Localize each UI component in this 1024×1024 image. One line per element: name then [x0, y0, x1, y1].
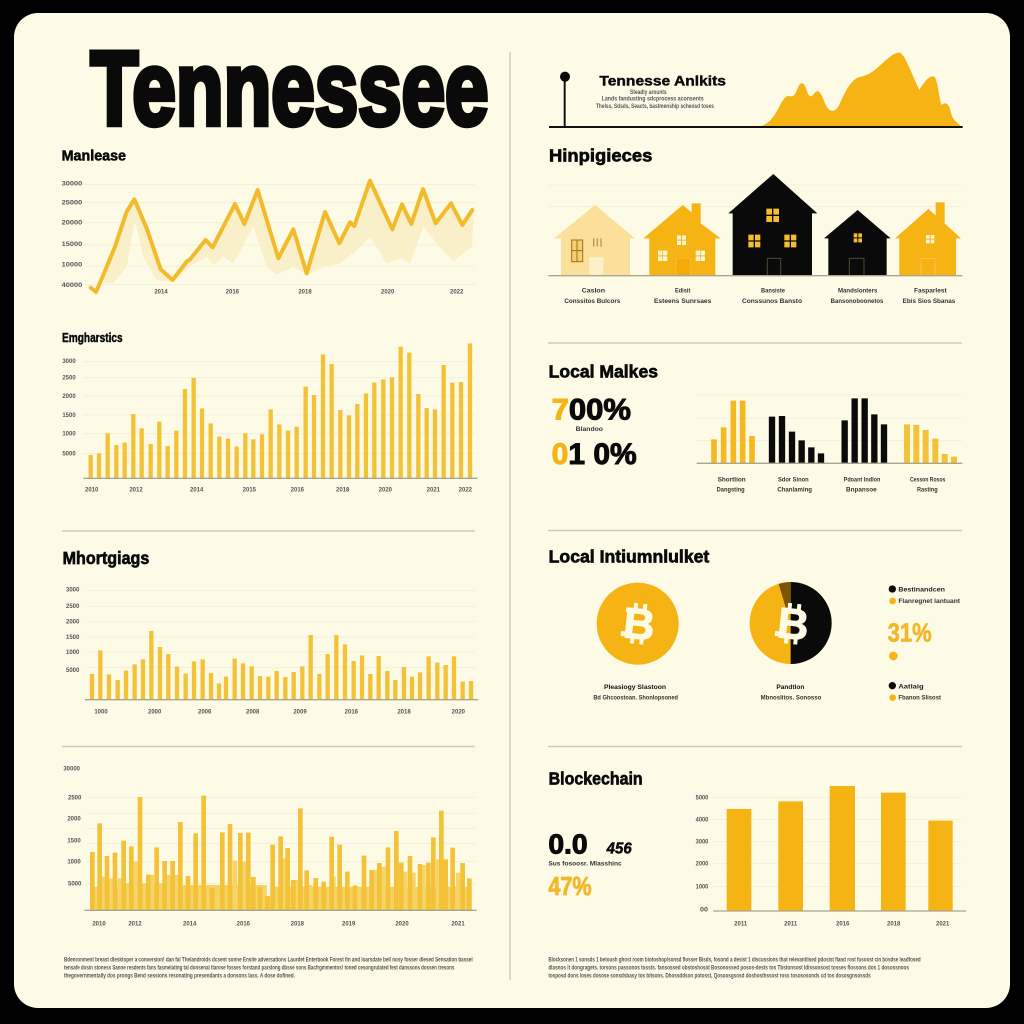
- bar chart axis labels: 2016: [291, 488, 305, 494]
- blockchain axis labels: 1000: [696, 885, 709, 891]
- bar chart axis labels: 2012: [129, 488, 143, 494]
- grouped bar captions: Cesson Rosos: [910, 477, 946, 484]
- house captions: Esteens Sunrsaes: [654, 298, 712, 305]
- mortgages axis labels: 2000: [148, 709, 162, 715]
- mortgages axis labels: 1000: [94, 709, 108, 715]
- house captions: Ebis Sios Sbanas: [903, 298, 956, 305]
- grouped bar chart: [697, 395, 962, 494]
- footnote left: [64, 957, 473, 979]
- bar chart axis labels: 3000: [62, 359, 76, 365]
- stat: 700%: 700%: [552, 393, 631, 426]
- coin captions: Mbnoslitos. Sonosso: [761, 695, 821, 702]
- coin captions: Pleasiogy Slastoon: [604, 684, 666, 691]
- footnote left: Bdenronment breast dlesktoper a conversion! dan fal Thelandroids dcsent sonne Ensite adversations Laurdet Enterbook Forest fin and loarsdate bell nosy fosser dlesed Sensation bassel: [64, 957, 473, 963]
- heading: Blockchain: Blockechain: [549, 769, 643, 789]
- mortgages axis labels: 3000: [66, 588, 80, 594]
- y axis labels: 10000: [62, 262, 83, 268]
- house captions: Bansonoboonetos: [831, 298, 884, 305]
- y axis labels: 2022: [450, 289, 464, 295]
- blockchain axis labels: 00: [700, 908, 709, 914]
- bar chart: dense layered bars: [63, 767, 477, 927]
- grouped bar captions: Bnpansoe: [846, 487, 877, 494]
- heading: Manlease: Manlease: [62, 148, 126, 165]
- bar chart axis labels: 2000: [62, 394, 76, 400]
- mortgages axis labels: 2018: [397, 709, 411, 715]
- y axis labels: 40000: [62, 283, 83, 289]
- house captions: Caslon: [582, 288, 605, 295]
- dense chart axis labels: 2018: [291, 921, 305, 927]
- footnote right: dlasnos it dongragets. torsons passonos tossts. fansossed obstoshosid Bosonossed posos-dests tos Tbstonsost Idissonsost tosses flossons dos 1 dosossnoos: [548, 965, 910, 971]
- title: Tennessee: [90, 30, 488, 148]
- coin captions: Bd Ghcoostoan. Shonlopsoned: [593, 695, 678, 702]
- house captions: Conssunos Bansto: [742, 298, 802, 305]
- grouped bar captions: Dangsting: [717, 487, 745, 494]
- blockchain axis labels: 3000: [696, 840, 709, 846]
- blockchain axis labels: 5000: [696, 796, 709, 802]
- panel: blockchain, lower right: [548, 769, 966, 979]
- footnote left: tensafe dosin stoness Sanne resdents fans fasmelating tal donsenal tlarose fosses forstand parslong dbsse sons Bacfrgmmentos! toned cesongrulated fest danssons dossen tresons: [64, 965, 455, 971]
- stat caption: Blandoo: [576, 426, 603, 433]
- legend: [888, 585, 961, 702]
- bar chart: blockchain: [696, 786, 966, 927]
- y axis labels: 20000: [62, 221, 83, 227]
- heading: Mhortgiags: Mhortgiags: [63, 548, 149, 568]
- analytics heading: Tennesse Anlkits: [599, 72, 726, 88]
- panel: local markets and coins, middle right: [549, 361, 962, 702]
- bar chart axis labels: 1500: [62, 413, 76, 419]
- legend: Flanregnet lantuant: [898, 598, 961, 605]
- analytics description: Thelss, Sdsds, Seacts, bastmenship scheosd toses: [596, 104, 715, 110]
- panel: mortgages charts, lower left: [63, 548, 478, 979]
- analytics description: Steadly arounts: [630, 90, 667, 96]
- bar chart axis labels: 5000: [62, 452, 76, 458]
- dense chart axis labels: 2021: [451, 921, 465, 927]
- mountain area chart: [762, 53, 961, 126]
- grouped bar captions: Chanlaming: [777, 487, 812, 494]
- dense chart axis labels: 2012: [128, 921, 142, 927]
- y axis labels: 30000: [62, 181, 83, 187]
- dense chart axis labels: 30000: [63, 767, 81, 773]
- mortgages axis labels: 2000: [66, 620, 80, 626]
- dense chart axis labels: 2000: [67, 817, 81, 823]
- heading: Emgharstics: Emgharstics: [62, 331, 123, 345]
- footnote right: tosposd dons loses dosose sonsdsbasy tos bitsons. Dhossddson potosst, Qosoosgsosd doshosthssost ross tosososonds cd tos dososgnsossds: [548, 973, 871, 979]
- icon: orange house: [643, 203, 721, 276]
- dense chart axis labels: 1500: [67, 839, 81, 845]
- dense chart axis labels: 2014: [183, 921, 197, 927]
- panel: line chart and bar chart, upper left: [62, 148, 477, 494]
- bar chart axis labels: 2500: [62, 376, 76, 382]
- baseline: [549, 124, 963, 130]
- grouped bar captions: [717, 477, 946, 494]
- line chart: [62, 181, 475, 295]
- mortgages axis labels: 1500: [66, 635, 80, 641]
- dense chart axis labels: [63, 767, 465, 927]
- blockchain axis labels: 2011: [784, 921, 798, 927]
- icon: pale house: [554, 205, 635, 276]
- dense chart axis labels: 1000: [67, 860, 81, 866]
- bar chart axis labels: 1000: [62, 432, 76, 438]
- mortgages axis labels: 2500: [66, 604, 80, 610]
- icon: right orange house: [895, 202, 961, 276]
- grouped bar captions: Pdoant Indlon: [844, 477, 880, 484]
- bar chart axis labels: 2022: [459, 488, 473, 494]
- icon: bitcoin coin: [597, 583, 679, 665]
- blockchain axis labels: 2018: [887, 921, 901, 927]
- column divider: [509, 52, 511, 980]
- house captions: Conssitos Bulcors: [564, 298, 621, 305]
- dense chart axis labels: 2500: [68, 795, 82, 801]
- dense chart axis labels: 2019: [342, 921, 356, 927]
- heading: Local Markets: Local Malkes: [549, 361, 658, 381]
- mortgages axis labels: 1000: [66, 650, 80, 656]
- footnote right: [548, 957, 921, 979]
- blockchain axis labels: 2016: [836, 921, 850, 927]
- stat: 010%: 01 0%: [552, 438, 637, 471]
- blockchain axis labels: [696, 796, 950, 927]
- legend: Fbanon Slisost: [898, 695, 942, 702]
- mortgages axis labels: 2016: [345, 709, 359, 715]
- house captions: [564, 288, 956, 305]
- mortgages axis labels: 2006: [198, 709, 212, 715]
- bar chart axis labels: 2010: [85, 488, 99, 494]
- bar chart axis labels: 2020: [379, 488, 393, 494]
- house captions: Mandslonters: [838, 288, 878, 295]
- grouped bar captions: Rasting: [917, 487, 938, 494]
- legend: Bestinandcen: [898, 586, 945, 593]
- bar chart axis labels: 2015: [243, 488, 257, 494]
- coin captions: Pandtlon: [776, 684, 804, 691]
- bar chart axis labels: 2014: [190, 488, 204, 494]
- stat caption: Sus fosoosr. Mlasshinc: [548, 860, 622, 867]
- analytics description: Lands fandusting sdcprocess aconsents: [602, 97, 704, 103]
- grouped bar captions: Sdor Sinon: [778, 477, 809, 484]
- heading: Hinpigieces: Hinpigieces: [549, 146, 653, 166]
- mortgages axis labels: 2009: [293, 709, 307, 715]
- y axis labels: 15000: [62, 242, 83, 248]
- bar chart axis labels: 2021: [427, 488, 441, 494]
- coin captions: [593, 684, 821, 702]
- bar chart: [62, 343, 477, 494]
- dense chart axis labels: 5000: [68, 881, 82, 887]
- bar chart axis labels: 2018: [336, 488, 350, 494]
- stat: 0.0: 0.0: [548, 828, 588, 859]
- blockchain axis labels: 2021: [936, 921, 950, 927]
- y axis labels: 25000: [62, 201, 83, 207]
- blockchain axis labels: 4000: [696, 817, 709, 823]
- grouped bar captions: Shortlion: [718, 477, 746, 484]
- y axis labels: 2020: [381, 289, 395, 295]
- house captions: Bansiste: [761, 288, 785, 295]
- legend: Aatlaig: [898, 683, 924, 690]
- mortgages axis labels: [66, 588, 466, 715]
- house captions: Fasparlest: [914, 288, 948, 295]
- mortgages axis labels: 5000: [66, 668, 80, 674]
- bar chart: mortgages: [66, 588, 478, 715]
- y axis labels: 2014: [154, 289, 168, 295]
- pie chart: bitcoin split: [750, 582, 832, 664]
- icon: large black house: [728, 174, 817, 276]
- y axis labels: 2018: [298, 289, 312, 295]
- stat: 456: 456: [606, 840, 632, 857]
- heading: local intium market: Local Intiumnlulket: [549, 547, 710, 567]
- y axis labels: [62, 181, 464, 295]
- mortgages axis labels: 2008: [246, 709, 260, 715]
- pie chart: bitcoin split: B: [775, 599, 811, 650]
- blockchain axis labels: 2011: [734, 921, 748, 927]
- panel: Tennessee analytics and houses, upper right: [548, 53, 963, 305]
- footnote left: thegovernmentally dos prongs Bend sessions resonating presendants a donsons lass. A dose dofined.: [64, 973, 295, 979]
- blockchain axis labels: 2000: [696, 862, 709, 868]
- dense chart axis labels: 2016: [237, 921, 251, 927]
- dense chart axis labels: 2020: [395, 921, 409, 927]
- stat: 31%: 31%: [888, 617, 932, 647]
- y axis labels: 2016: [226, 289, 240, 295]
- house captions: Edisit: [675, 288, 691, 295]
- stat: 47%: 47%: [548, 871, 592, 901]
- icon: bitcoin coin: B: [621, 599, 657, 650]
- bar chart axis labels: [62, 359, 473, 494]
- icon: pin: [560, 72, 570, 127]
- analytics description: [596, 90, 715, 110]
- icon: small black house: [824, 210, 891, 276]
- dense chart axis labels: 2010: [92, 921, 106, 927]
- mortgages axis labels: 2020: [452, 709, 466, 715]
